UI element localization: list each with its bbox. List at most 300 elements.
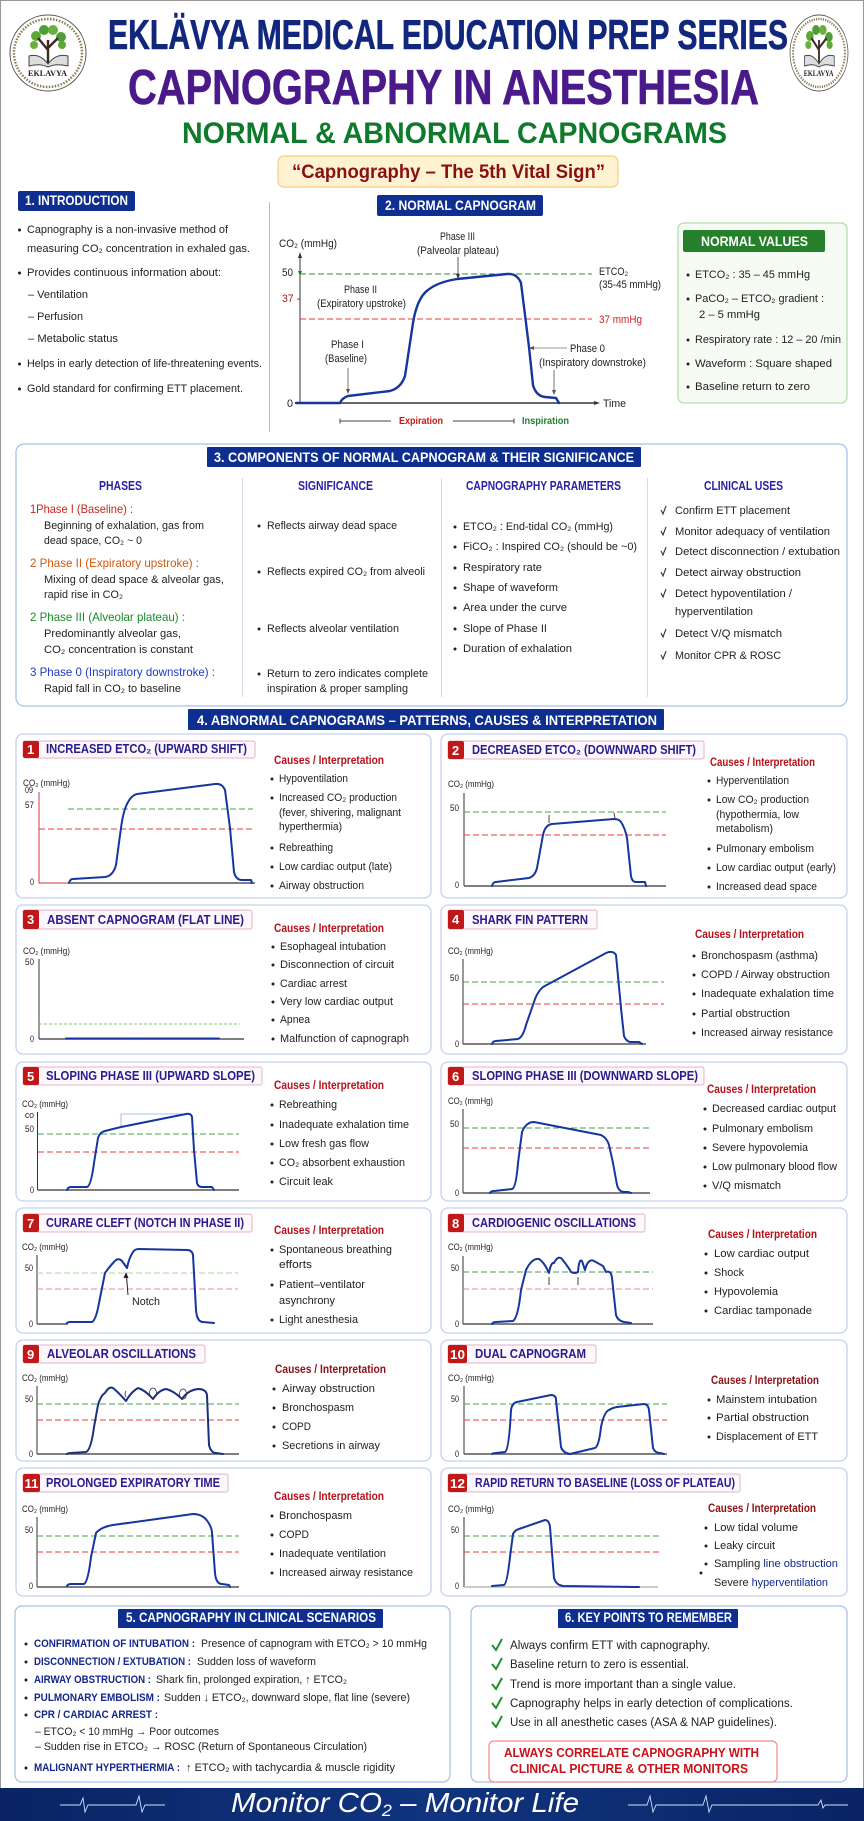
- chart 4: [448, 946, 664, 1049]
- causes list 2: Low CO₂ production: [716, 794, 809, 806]
- chart 11: 50: [25, 1525, 33, 1535]
- text block: normal values list: Baseline return to zero: [695, 381, 810, 393]
- label: ETCO2 range: ETCO₂: [599, 266, 628, 278]
- chart 3: CO₂ (mmHg): [23, 946, 70, 956]
- heading: section 5: 5. CAPNOGRAPHY IN CLINICAL SCENARIOS: [126, 1610, 376, 1625]
- text block: normal values list: 2 – 5 mmHg: [699, 309, 760, 321]
- causes list 3: Causes / Interpretation: [274, 921, 384, 935]
- chart 2: 0: [455, 880, 459, 890]
- callout: always correlate: ALWAYS CORRELATE CAPNOGRAPHY WITH: [504, 1745, 759, 1760]
- panel: 10 dual capnogram: [441, 1340, 847, 1461]
- causes list 5: Rebreathing: [279, 1099, 337, 1111]
- chart 4: 50: [450, 973, 459, 983]
- causes list 1: (fever, shivering, malignant: [279, 807, 401, 819]
- chart 8: [448, 1242, 653, 1329]
- heading: section 4 abnormal capnograms: 4. ABNORMAL CAPNOGRAMS – PATTERNS, CAUSES & INTERPRETATION: [197, 712, 657, 728]
- label: Phase I: Phase I: [331, 339, 364, 351]
- label: Phase I: [325, 339, 367, 394]
- causes list 5: [270, 1078, 409, 1188]
- causes list 2: (hypothermia, low: [716, 809, 799, 821]
- causes list 4: COPD / Airway obstruction: [701, 969, 830, 981]
- label: ETCO2 range: [599, 266, 661, 291]
- panel title 10: 10: [450, 1347, 465, 1362]
- text block: scenarios list: Sudden ↓ ETCO₂, downward slope, flat line (severe): [164, 1692, 410, 1704]
- column: capnography parameters: CAPNOGRAPHY PARAMETERS: [466, 479, 621, 493]
- panel title 3: [23, 910, 252, 929]
- footer banner: [0, 1787, 864, 1821]
- causes list 11: Bronchospasm: [279, 1510, 352, 1522]
- chart 9: [22, 1373, 239, 1459]
- panel: 4 shark fin: [441, 905, 847, 1054]
- causes list 8: Hypovolemia: [714, 1286, 779, 1298]
- column: clinical uses: Detect disconnection / extubation: [675, 546, 840, 558]
- panel title 2: DECREASED ETCO₂ (DOWNWARD SHIFT): [472, 742, 696, 757]
- causes list 4: Inadequate exhalation time: [701, 988, 834, 1000]
- panel title 2: 2: [452, 743, 459, 758]
- panel title 7: CURARE CLEFT (NOTCH IN PHASE II): [46, 1215, 244, 1230]
- causes list 4: Partial obstruction: [701, 1008, 790, 1020]
- column: phases: Mixing of dead space & alveolar gas,: [44, 574, 224, 586]
- chart 1: 0: [30, 877, 34, 887]
- column: significance: SIGNIFICANCE: [298, 479, 373, 493]
- arrow: notch pointer: [124, 1272, 128, 1295]
- chart 7: CO₂ (mmHg): [22, 1242, 68, 1252]
- column: significance: Reflects alveolar ventilation: [267, 623, 399, 635]
- causes list 11: [270, 1489, 413, 1579]
- chart 7: 50: [25, 1263, 33, 1273]
- tagline pill: [278, 156, 618, 187]
- panel title 9: [23, 1345, 205, 1363]
- causes list 11: COPD: [279, 1529, 309, 1541]
- causes list 10: Partial obstruction: [716, 1412, 809, 1424]
- causes list 6: Causes / Interpretation: [707, 1082, 816, 1096]
- column: clinical uses: hyperventilation: [675, 606, 753, 618]
- chart 5: 50: [25, 1124, 34, 1134]
- panel title 10: DUAL CAPNOGRAM: [475, 1346, 586, 1361]
- logo: right Eklavya emblem: EKLAVYA: [804, 69, 834, 78]
- column: phases: 3 Phase 0 (Inspiratory downstroke) :: [30, 665, 215, 679]
- causes list 12: Leaky circuit: [714, 1540, 775, 1552]
- column: capnography parameters: FiCO₂ : Inspired CO₂ (should be ~0): [463, 541, 637, 553]
- causes list 1: hyperthermia): [279, 821, 342, 833]
- logo: left Eklavya emblem: [10, 15, 86, 91]
- text block: introduction bullets: [18, 224, 262, 395]
- column: significance: [258, 479, 428, 695]
- chart 12: CO₂ (mmHg): [448, 1504, 494, 1514]
- causes list 7: efforts: [279, 1259, 313, 1271]
- text block: key points list: [510, 1640, 793, 1729]
- label: Phase II: [317, 284, 406, 310]
- panel title 12: RAPID RETURN TO BASELINE (LOSS OF PLATEAU): [475, 1475, 735, 1490]
- text block: normal values list: Respiratory rate : 12 – 20 /min: [695, 334, 841, 346]
- causes list 6: V/Q mismatch: [712, 1180, 781, 1192]
- text block: introduction bullets: – Perfusion: [28, 311, 83, 323]
- causes list 5: Causes / Interpretation: [274, 1078, 384, 1092]
- causes list 11: Causes / Interpretation: [274, 1489, 384, 1503]
- text block: introduction bullets: measuring CO₂ concentration in exhaled gas.: [27, 243, 250, 255]
- causes list 9: Airway obstruction: [282, 1383, 375, 1395]
- chart 10: CO₂ (mmHg): [448, 1373, 494, 1383]
- chart 6: CO₂ (mmHg): [448, 1096, 493, 1106]
- panel: 11 prolonged expiratory time: [16, 1468, 431, 1596]
- causes list 2: Hyperventilation: [716, 775, 789, 787]
- panel title 11: PROLONGED EXPIRATORY TIME: [46, 1475, 220, 1490]
- icon: right ECG trace: [628, 1796, 848, 1812]
- chart 10: 50: [451, 1394, 459, 1404]
- subtitle: NORMAL & ABNORMAL CAPNOGRAMS: [182, 117, 727, 150]
- chart: normal capnogram waveform: Time: [603, 398, 626, 410]
- heading: section 6: [558, 1609, 738, 1628]
- panel: 12 rapid return to baseline: [441, 1468, 847, 1596]
- text block: normal values list: PaCO₂ – ETCO₂ gradient :: [695, 293, 824, 305]
- causes list 4: Increased airway resistance: [701, 1027, 833, 1039]
- panel title 4: 4: [452, 912, 460, 927]
- causes list 9: Secretions in airway: [282, 1440, 380, 1452]
- panel title 8: [448, 1214, 645, 1232]
- text block: scenarios list: ↑ ETCO₂ with tachycardia & muscle rigidity: [186, 1762, 395, 1774]
- causes list 1: Increased CO₂ production: [279, 792, 397, 804]
- column: capnography parameters: Duration of exhalation: [463, 643, 572, 655]
- causes list 2: metabolism): [716, 823, 773, 835]
- causes list 12: Severe hyperventilation: [714, 1577, 828, 1589]
- chart 3: 50: [25, 957, 34, 967]
- panel title 7: 7: [27, 1216, 34, 1231]
- panel: normal capnogram: [279, 195, 661, 427]
- text block: scenarios list: CPR / CARDIAC ARREST :: [34, 1709, 158, 1721]
- panel: 6 sloping phase III downward: [441, 1062, 847, 1201]
- column: clinical uses: [661, 479, 840, 662]
- text block: introduction bullets: Capnography is a non-invasive method of: [27, 224, 229, 236]
- callout: always correlate: CLINICAL PICTURE & OTHER MONITORS: [510, 1761, 748, 1776]
- text block: scenarios list: [24, 1638, 427, 1774]
- causes list 7: Light anesthesia: [279, 1314, 359, 1326]
- text block: introduction bullets: – Ventilation: [28, 289, 88, 301]
- text block: scenarios list: Sudden loss of waveform: [197, 1656, 316, 1668]
- heading: section 5: [118, 1609, 383, 1628]
- causes list 6: Low pulmonary blood flow: [712, 1161, 837, 1173]
- label: Phase III: [417, 231, 499, 279]
- arrow: expiration: Expiration: [399, 415, 443, 427]
- chart 8: CO₂ (mmHg): [448, 1242, 493, 1252]
- chart 1: CO₂ (mmHg): [23, 778, 70, 788]
- heading: section 3: 3. COMPONENTS OF NORMAL CAPNOGRAM & THEIR SIGNIFICANCE: [214, 450, 634, 465]
- causes list 7: asynchrony: [279, 1295, 335, 1307]
- causes list 4: [692, 927, 834, 1039]
- column: significance: Reflects expired CO₂ from alveoli: [267, 566, 425, 578]
- causes list 8: Cardiac tamponade: [714, 1305, 812, 1317]
- causes list 3: Esophageal intubation: [280, 941, 386, 953]
- column: phases: rapid rise in CO₂: [44, 589, 123, 601]
- chart: normal capnogram waveform: 50: [282, 267, 293, 279]
- causes list 10: Mainstem intubation: [716, 1394, 817, 1406]
- panel: normal values: [678, 223, 847, 403]
- panel: introduction: [18, 191, 262, 395]
- icons: green check marks: [492, 1639, 502, 1727]
- causes list 8: Shock: [714, 1267, 744, 1279]
- label: ETCO2 range: (35-45 mmHg): [599, 279, 661, 291]
- logo: right Eklavya emblem: [790, 15, 848, 91]
- text block: key points list: Use in all anesthetic cases (ASA & NAP guidelines).: [510, 1717, 777, 1729]
- causes list 8: Low cardiac output: [714, 1248, 809, 1260]
- text block: normal values list: ETCO₂ : 35 – 45 mmHg: [695, 269, 810, 281]
- chart 5: co: [25, 1110, 34, 1120]
- causes list 12: Low tidal volume: [714, 1522, 798, 1534]
- causes list 1: Low cardiac output (late): [279, 861, 392, 873]
- panel title 5: 5: [27, 1069, 34, 1084]
- label: Phase I: (Baseline): [325, 353, 367, 365]
- causes list 1: [270, 753, 401, 892]
- chart 2: [448, 779, 666, 890]
- panel title 11: [23, 1474, 228, 1492]
- panel title 9: ALVEOLAR OSCILLATIONS: [47, 1346, 196, 1361]
- causes list 3: Cardiac arrest: [280, 978, 347, 990]
- footer slogan: – Monitor Life: [392, 1787, 579, 1818]
- chart 7: 0: [29, 1319, 33, 1329]
- column: significance: Reflects airway dead space: [267, 520, 397, 532]
- causes list 3: [272, 921, 409, 1045]
- chart: normal capnogram waveform: 0: [287, 398, 293, 410]
- column: clinical uses: Detect airway obstruction: [675, 567, 801, 579]
- text block: normal values list: [686, 269, 841, 393]
- causes list 6: Severe hypovolemia: [712, 1142, 809, 1154]
- panel title 6: SLOPING PHASE III (DOWNWARD SLOPE): [472, 1068, 698, 1083]
- chart 2: 50: [450, 803, 459, 813]
- causes list 11: Increased airway resistance: [279, 1567, 413, 1579]
- panel title 5: [23, 1067, 262, 1085]
- causes list 2: Increased dead space: [716, 881, 817, 893]
- causes list 12: Causes / Interpretation: [708, 1501, 816, 1515]
- panel title 6: 6: [452, 1069, 459, 1084]
- panel title 8: CARDIOGENIC OSCILLATIONS: [472, 1215, 636, 1230]
- causes list 4: Bronchospasm (asthma): [701, 950, 818, 962]
- chart 10: [448, 1373, 667, 1459]
- column: phases: PHASES: [99, 479, 142, 493]
- text block: key points list: Always confirm ETT with capnography.: [510, 1640, 710, 1652]
- causes list 12: Sampling line obstruction: [714, 1558, 838, 1570]
- chart 9: CO₂ (mmHg): [22, 1373, 68, 1383]
- text block: scenarios list: DISCONNECTION / EXTUBATION :: [34, 1656, 191, 1668]
- panel title 2: [448, 741, 704, 759]
- panel: 9 alveolar oscillations: [16, 1340, 431, 1461]
- column: capnography parameters: Area under the curve: [463, 602, 567, 614]
- panel: 2 decreased ETCO2: [441, 734, 847, 898]
- chart 1: 09: [25, 785, 33, 795]
- chart 5: [22, 1099, 239, 1195]
- panel title 1: INCREASED ETCO₂ (UPWARD SHIFT): [46, 741, 247, 756]
- heading: normal capnogram: 2. NORMAL CAPNOGRAM: [385, 198, 536, 213]
- chart 4: CO₂ (mmHg): [448, 946, 493, 956]
- panel title 3: 3: [27, 912, 34, 927]
- text block: scenarios list: – Sudden rise in ETCO₂ → ROSC (Return of Spontaneous Circulation): [35, 1741, 367, 1753]
- causes list 10: [708, 1373, 819, 1443]
- text block: scenarios list: – ETCO₂ < 10 mmHg → Poor outcomes: [35, 1726, 219, 1738]
- panel: 8 cardiogenic oscillations: [441, 1208, 847, 1333]
- chart 11: 0: [29, 1581, 33, 1591]
- chart 2: CO₂ (mmHg): [448, 779, 494, 789]
- causes list 2: Pulmonary embolism: [716, 843, 814, 855]
- column: clinical uses: Confirm ETT placement: [675, 505, 790, 517]
- chart 11: [22, 1504, 239, 1591]
- label: Phase III: Phase III: [440, 231, 475, 243]
- column: phases: Predominantly alveolar gas,: [44, 628, 181, 640]
- column: phases: dead space, CO₂ ~ 0: [44, 535, 142, 547]
- panel title 10: [448, 1345, 596, 1363]
- panel title 3: ABSENT CAPNOGRAM (FLAT LINE): [47, 912, 244, 927]
- column: capnography parameters: Shape of waveform: [463, 582, 558, 594]
- column: clinical uses: CLINICAL USES: [704, 479, 783, 493]
- causes list 5: CO₂ absorbent exhaustion: [279, 1157, 405, 1169]
- column: capnography parameters: Respiratory rate: [463, 562, 542, 574]
- panel: 5 sloping phase III upward: [16, 1062, 431, 1201]
- panel title 5: SLOPING PHASE III (UPWARD SLOPE): [46, 1068, 255, 1083]
- column: clinical uses: Monitor CPR & ROSC: [675, 650, 781, 662]
- causes list 5: Circuit leak: [279, 1176, 333, 1188]
- chart 5: 0: [30, 1185, 34, 1195]
- column: clinical uses: Detect hypoventilation /: [675, 588, 793, 600]
- panel: components of normal capnogram: [16, 444, 847, 706]
- causes list 9: Causes / Interpretation: [275, 1362, 386, 1376]
- causes list 7: [270, 1223, 392, 1326]
- chart 8: 0: [455, 1319, 459, 1329]
- text block: scenarios list: CONFIRMATION OF INTUBATION :: [34, 1638, 195, 1650]
- panel: clinical scenarios: [15, 1606, 450, 1782]
- label: Phase 0: Phase 0: [570, 343, 605, 355]
- column: significance: Return to zero indicates complete: [267, 668, 428, 680]
- panel title 12: [448, 1474, 740, 1492]
- heading: normal capnogram: [377, 195, 543, 216]
- text block: key points list: Trend is more important than a single value.: [510, 1679, 736, 1691]
- causes list 3: Disconnection of circuit: [280, 959, 394, 971]
- causes list 9: [272, 1362, 386, 1452]
- column: phases: 2 Phase III (Alveolar plateau) :: [30, 610, 185, 624]
- column: phases: 1Phase I (Baseline) :: [30, 502, 133, 516]
- icon: left ECG trace: [60, 1796, 165, 1812]
- chart: normal capnogram waveform: 37 -: [282, 293, 300, 305]
- label: notch: Notch: [132, 1296, 160, 1308]
- causes list 5: Inadequate exhalation time: [279, 1119, 409, 1131]
- panel title 11: 11: [24, 1476, 38, 1491]
- panel: 3 absent capnogram: [16, 905, 431, 1054]
- text block: key points list: Baseline return to zero is essential.: [510, 1659, 689, 1671]
- causes list 1: Causes / Interpretation: [274, 753, 384, 767]
- chart 9: 0: [29, 1449, 33, 1459]
- causes list 7: Spontaneous breathing: [279, 1244, 392, 1256]
- causes list 3: Very low cardiac output: [280, 996, 393, 1008]
- panel title 9: 9: [27, 1347, 34, 1362]
- chart 6: 0: [455, 1188, 459, 1198]
- chart 9: 50: [25, 1394, 33, 1404]
- text block: scenarios list: MALIGNANT HYPERTHERMIA :: [34, 1762, 180, 1774]
- column: phases: CO₂ concentration is constant: [44, 644, 193, 656]
- text block: scenarios list: AIRWAY OBSTRUCTION :: [34, 1674, 151, 1686]
- causes list 8: [704, 1227, 817, 1317]
- column: phases: Rapid fall in CO₂ to baseline: [44, 683, 181, 695]
- chart 12: 50: [451, 1525, 459, 1535]
- chart 12: 0: [455, 1581, 459, 1591]
- tagline pill: “Capnography – The 5th Vital Sign”: [292, 162, 605, 183]
- chart 3: [23, 946, 244, 1044]
- text block: scenarios list: Presence of capnogram with ETCO₂ > 10 mmHg: [201, 1638, 427, 1650]
- causes list 6: [704, 1082, 837, 1192]
- column: capnography parameters: [454, 479, 637, 655]
- column: phases: 2 Phase II (Expiratory upstroke) :: [30, 556, 199, 570]
- chart 8: 50: [451, 1263, 459, 1273]
- column: significance: inspiration & proper sampling: [267, 683, 408, 695]
- text block: introduction bullets: Gold standard for confirming ETT placement.: [27, 383, 243, 395]
- label: Phase II: Phase II: [344, 284, 377, 296]
- panel title 4: SHARK FIN PATTERN: [472, 912, 588, 927]
- column: phases: Beginning of exhalation, gas from: [44, 520, 204, 532]
- panel title 7: [23, 1214, 252, 1232]
- causes list 4: Causes / Interpretation: [695, 927, 804, 941]
- footer slogan: 2: [381, 1801, 392, 1820]
- label: 37 mmHg: 37 mmHg: [599, 314, 642, 326]
- panel title 4: [448, 910, 597, 929]
- causes list 1: Airway obstruction: [279, 880, 364, 892]
- column: clinical uses: Monitor adequacy of ventilation: [675, 526, 830, 538]
- callout: always correlate: [489, 1741, 777, 1782]
- causes list 1: Rebreathing: [279, 842, 333, 854]
- heading: introduction: 1. INTRODUCTION: [25, 193, 128, 208]
- panel: key points: [471, 1606, 847, 1782]
- causes list 8: Causes / Interpretation: [708, 1227, 817, 1241]
- text block: scenarios list: PULMONARY EMBOLISM :: [34, 1692, 160, 1704]
- panel title 8: 8: [452, 1216, 459, 1231]
- chart 5: CO₂ (mmHg): [22, 1099, 68, 1109]
- chart: normal capnogram waveform: [279, 231, 661, 427]
- text block: scenarios list: Shark fin, prolonged expiration, ↑ ETCO₂: [156, 1674, 347, 1686]
- chart 3: 0: [30, 1034, 34, 1044]
- causes list 3: Malfunction of capnograph: [280, 1033, 409, 1045]
- chart 11: CO₂ (mmHg): [22, 1504, 68, 1514]
- causes list 2: Causes / Interpretation: [710, 755, 815, 769]
- causes list 10: Causes / Interpretation: [711, 1373, 819, 1387]
- panel: 1 increased ETCO2: [16, 734, 431, 898]
- text block: introduction bullets: – Metabolic status: [28, 333, 119, 345]
- chart 6: [448, 1096, 650, 1198]
- text block: normal values list: Waveform : Square shaped: [695, 358, 832, 370]
- heading: section 6: 6. KEY POINTS TO REMEMBER: [565, 1610, 732, 1625]
- causes list 5: Low fresh gas flow: [279, 1138, 369, 1150]
- causes list 1: Hypoventilation: [279, 773, 348, 785]
- chart 7: [22, 1242, 238, 1329]
- arrow: expiration: [340, 415, 569, 427]
- arrow: expiration: Inspiration: [522, 415, 569, 427]
- chart 4: 0: [455, 1039, 459, 1049]
- panel title 1: 1: [27, 742, 34, 757]
- causes list 12: [700, 1501, 838, 1589]
- causes list 3: Apnea: [280, 1014, 311, 1026]
- heading: normal values: [683, 230, 825, 252]
- causes list 9: COPD: [282, 1421, 311, 1433]
- heading: normal values: NORMAL VALUES: [701, 233, 808, 249]
- column: capnography parameters: Slope of Phase II: [463, 623, 547, 635]
- footer slogan: Monitor CO: [231, 1787, 374, 1818]
- text block: key points list: Capnography helps in early detection of complications.: [510, 1698, 793, 1710]
- panel title 6: [448, 1067, 704, 1085]
- panel: 7 curare cleft: [16, 1208, 431, 1333]
- causes list 7: Causes / Interpretation: [274, 1223, 384, 1237]
- label: Phase III: (Palveolar plateau): [417, 245, 499, 257]
- column: clinical uses: Detect V/Q mismatch: [675, 628, 782, 640]
- chart 10: 0: [455, 1449, 459, 1459]
- text block: introduction bullets: Helps in early detection of life-threatening events.: [27, 358, 262, 370]
- causes list 9: Bronchospasm: [282, 1402, 354, 1414]
- causes list 7: Patient–ventilator: [279, 1279, 365, 1291]
- causes list 11: Inadequate ventilation: [279, 1548, 386, 1560]
- column: capnography parameters: ETCO₂ : End-tidal CO₂ (mmHg): [463, 521, 613, 533]
- column: phases: [30, 479, 224, 695]
